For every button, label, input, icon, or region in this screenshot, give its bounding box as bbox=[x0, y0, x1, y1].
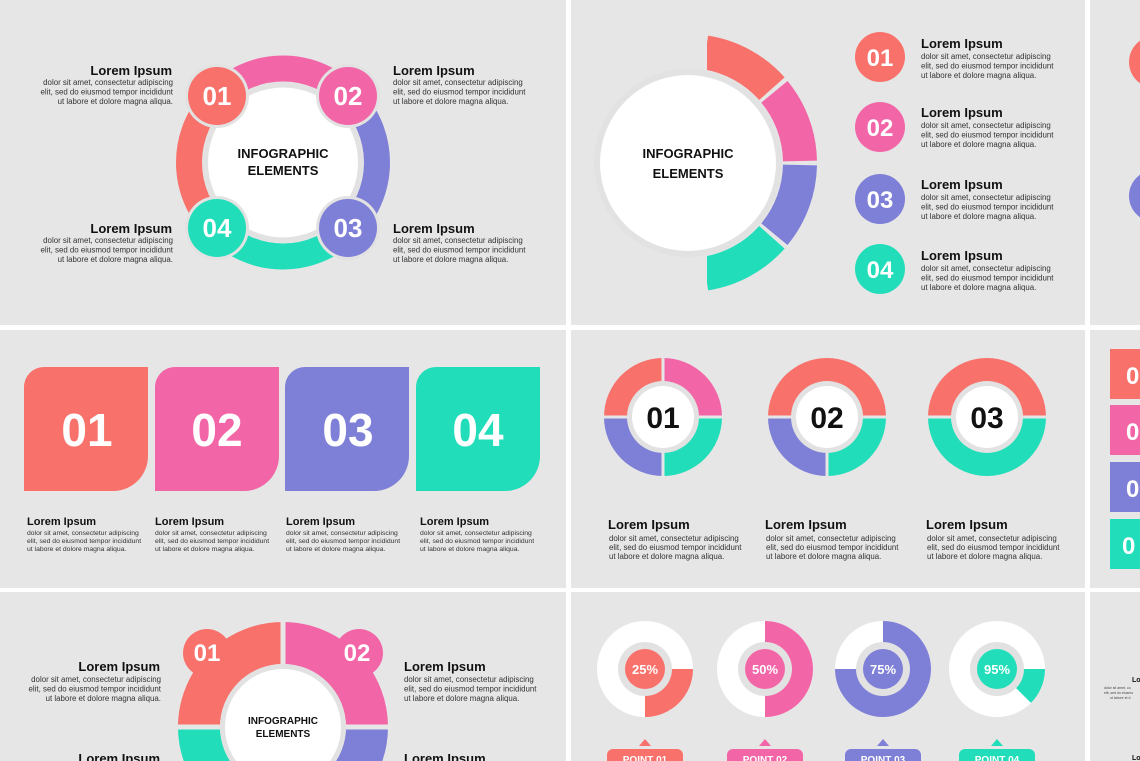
text blocks: dolor sit amet, consectetur adipiscing bbox=[43, 78, 173, 87]
text blocks bbox=[41, 63, 174, 264]
panel: numbered boxes: dolor sit amet, consectetur adipiscing bbox=[286, 530, 398, 537]
panel: quadrant ring with bumps: Lorem Ipsum bbox=[78, 659, 160, 674]
list items: Lorem Ipsum bbox=[921, 177, 1003, 192]
donut captions: ut labore et dolore magna aliqua. bbox=[609, 552, 724, 561]
ring segments bbox=[189, 69, 377, 256]
panel: half arc with list bbox=[594, 20, 1054, 310]
panel: numbered boxes: 01 bbox=[61, 404, 113, 456]
list items: Lorem Ipsum bbox=[921, 248, 1003, 263]
donut 03: 03 bbox=[970, 402, 1004, 435]
panel: numbered boxes: ut labore et dolore magna aliqua. bbox=[155, 546, 254, 553]
panel: quadrant ring with bumps: elit, sed do eiusmod tempor incididunt bbox=[404, 684, 537, 694]
panel: numbered boxes: 03 bbox=[322, 404, 374, 456]
panel: numbered boxes: 04 bbox=[452, 404, 504, 456]
list items: dolor sit amet, consectetur adipiscing bbox=[921, 121, 1051, 130]
text blocks: elit, sed do eiusmod tempor incididunt bbox=[41, 88, 174, 96]
panel: quadrant ring with bumps: INFOGRAPHIC bbox=[248, 716, 318, 727]
panel: right edge stacked boxes: 0 bbox=[1126, 419, 1139, 446]
number circles: 01 bbox=[203, 81, 231, 111]
text blocks: ut labore et dolore magna aliqua. bbox=[58, 97, 173, 106]
donut captions: ut labore et dolore magna aliqua. bbox=[927, 552, 1042, 561]
panel: quadrant ring with bumps: Lorem Ipsum bbox=[404, 659, 486, 674]
donut 02 bbox=[766, 358, 888, 478]
panel: ring with four numbered circles: dolor sit amet, consectetur adipiscing bbox=[393, 236, 523, 245]
pie 25% bbox=[597, 621, 693, 717]
panel: half arc with list: ELEMENTS bbox=[653, 166, 724, 181]
panel: numbered boxes: ut labore et dolore magna aliqua. bbox=[420, 546, 519, 553]
donut captions: Lorem Ipsum bbox=[765, 517, 847, 532]
panel: ring with four numbered circles: elit, sed do eiusmod tempor incididunt bbox=[393, 88, 526, 96]
donut captions: ut labore et dolore magna aliqua. bbox=[766, 552, 881, 561]
panel: numbered boxes: 02 bbox=[191, 404, 243, 456]
text blocks: elit, sed do eiusmod tempor incididunt bbox=[41, 246, 174, 254]
point labels bbox=[607, 739, 1035, 761]
number circles: 03 bbox=[334, 213, 362, 243]
list items: Lorem Ipsum bbox=[921, 105, 1003, 120]
panel: right edge stacked boxes: 0 bbox=[1126, 476, 1139, 503]
donut 02: 02 bbox=[810, 402, 844, 435]
panel: numbered boxes: elit, sed do eiusmod tempor incididunt bbox=[27, 538, 141, 545]
panel: quadrant ring with bumps bbox=[29, 615, 537, 761]
pie 75%: 75% bbox=[870, 662, 896, 677]
number circles: 04 bbox=[203, 213, 232, 243]
panel: segmented donuts bbox=[602, 356, 1060, 561]
list items: elit, sed do eiusmod tempor incididunt bbox=[921, 130, 1054, 140]
panel: quadrant ring with bumps: 01 bbox=[194, 640, 220, 667]
text blocks: dolor sit amet, consectetur adipiscing bbox=[43, 236, 173, 245]
pie 95%: 95% bbox=[984, 662, 1010, 677]
number circles: 02 bbox=[334, 81, 362, 111]
panel: numbered boxes: Lorem Ipsum bbox=[27, 516, 96, 528]
panel: quadrant ring with bumps: dolor sit amet, consectetur adipiscing bbox=[31, 675, 161, 684]
pie 50%: 50% bbox=[752, 662, 778, 677]
list items: ut labore et dolore magna aliqua. bbox=[921, 140, 1036, 149]
list items: elit, sed do eiusmod tempor incididunt bbox=[921, 202, 1054, 212]
panel: right edge stacked boxes: 0 bbox=[1126, 363, 1139, 390]
panel: numbered boxes: ut labore et dolore magna aliqua. bbox=[286, 546, 385, 553]
panel: numbered boxes: Lorem Ipsum bbox=[420, 516, 489, 528]
list items: elit, sed do eiusmod tempor incididunt bbox=[921, 274, 1054, 282]
panel: quadrant ring with bumps: ut labore et dolore magna aliqua. bbox=[404, 694, 519, 703]
panel: right edge tiny text: ut labore et d bbox=[1110, 696, 1130, 700]
donut captions: dolor sit amet, consectetur adipiscing bbox=[927, 534, 1057, 543]
list items: 04 bbox=[867, 257, 894, 284]
panel: ring with four numbered circles bbox=[41, 63, 526, 264]
donut captions: Lorem Ipsum bbox=[926, 517, 1008, 532]
panel: right edge tiny text: elit, sed do eiusmo bbox=[1104, 691, 1133, 695]
donut 01 bbox=[602, 356, 724, 478]
list items: ut labore et dolore magna aliqua. bbox=[921, 212, 1036, 221]
panel: numbered boxes: dolor sit amet, consectetur adipiscing bbox=[155, 530, 267, 537]
panel: ring with four numbered circles: dolor sit amet, consectetur adipiscing bbox=[393, 78, 523, 87]
panel: right edge tiny text bbox=[1104, 677, 1140, 761]
panel: quadrant ring with bumps: dolor sit amet, consectetur adipiscing bbox=[404, 675, 534, 684]
panel: numbered boxes: ut labore et dolore magna aliqua. bbox=[27, 546, 126, 553]
panel: quadrant ring with bumps: ut labore et dolore magna aliqua. bbox=[46, 694, 161, 703]
donut 03 bbox=[926, 358, 1048, 476]
panel: numbered boxes: elit, sed do eiusmod tempor incididunt bbox=[420, 538, 534, 545]
list items: dolor sit amet, consectetur adipiscing bbox=[921, 264, 1051, 273]
list items: 02 bbox=[867, 115, 893, 142]
list items: elit, sed do eiusmod tempor incididunt bbox=[921, 62, 1054, 70]
panel: ring with four numbered circles: Lorem Ipsum bbox=[393, 63, 475, 78]
panel: ring with four numbered circles: Lorem Ipsum bbox=[393, 221, 475, 236]
donut 01: 01 bbox=[646, 402, 680, 435]
donut captions: dolor sit amet, consectetur adipiscing bbox=[766, 534, 896, 543]
panel: numbered boxes: elit, sed do eiusmod tempor incididunt bbox=[286, 538, 400, 545]
donut captions: Lorem Ipsum bbox=[608, 517, 690, 532]
panel: numbered boxes: Lorem Ipsum bbox=[155, 516, 224, 528]
text blocks: Lorem Ipsum bbox=[90, 221, 172, 236]
donut captions: elit, sed do eiusmod tempor incididunt bbox=[927, 543, 1060, 552]
panel: quadrant ring with bumps: 02 bbox=[344, 640, 370, 667]
donut captions: elit, sed do eiusmod tempor incididunt bbox=[609, 543, 742, 552]
panel: right edge stacked boxes bbox=[1110, 349, 1140, 569]
center title: INFOGRAPHIC bbox=[238, 146, 329, 161]
pie 25%: 25% bbox=[632, 662, 658, 677]
list items bbox=[855, 32, 1054, 294]
panel: numbered boxes: Lorem Ipsum bbox=[286, 516, 355, 528]
list items: ut labore et dolore magna aliqua. bbox=[921, 71, 1036, 80]
list items: ut labore et dolore magna aliqua. bbox=[921, 283, 1036, 292]
panel: ring with four numbered circles: ELEMENTS bbox=[248, 163, 319, 178]
panel: numbered boxes: dolor sit amet, consectetur adipiscing bbox=[27, 530, 139, 537]
list items: dolor sit amet, consectetur adipiscing bbox=[921, 193, 1051, 202]
panel: right edge stacked boxes: 0 bbox=[1122, 533, 1135, 560]
panel: numbered boxes: elit, sed do eiusmod tempor incididunt bbox=[155, 538, 269, 545]
pie 95% bbox=[949, 621, 1045, 717]
arc segments bbox=[706, 52, 800, 274]
panel: quadrant ring with bumps: elit, sed do eiusmod tempor incididunt bbox=[29, 684, 162, 694]
donut captions: elit, sed do eiusmod tempor incididunt bbox=[766, 543, 899, 552]
panel: quadrant ring with bumps: ELEMENTS bbox=[256, 729, 311, 740]
list items: dolor sit amet, consectetur adipiscing bbox=[921, 52, 1051, 61]
panel: percentage pies bbox=[597, 621, 1045, 761]
list items: 01 bbox=[867, 45, 893, 72]
panel: right edge tiny text: dolor sit amet, co bbox=[1104, 686, 1131, 690]
number circles bbox=[185, 64, 380, 260]
donut captions: dolor sit amet, consectetur adipiscing bbox=[609, 534, 739, 543]
donut captions bbox=[608, 517, 1060, 561]
arc center title: INFOGRAPHIC bbox=[642, 146, 734, 161]
panel: right edge partial circles bbox=[1129, 36, 1140, 222]
panel: numbered boxes bbox=[24, 367, 540, 553]
panel: ring with four numbered circles: elit, sed do eiusmod tempor incididunt bbox=[393, 246, 526, 254]
pie 75% bbox=[835, 621, 931, 717]
panel: ring with four numbered circles: ut labore et dolore magna aliqua. bbox=[393, 97, 508, 106]
text blocks: ut labore et dolore magna aliqua. bbox=[58, 255, 173, 264]
pie 50% bbox=[717, 621, 813, 717]
text blocks: Lorem Ipsum bbox=[90, 63, 172, 78]
list items: Lorem Ipsum bbox=[921, 36, 1003, 51]
panel: ring with four numbered circles: ut labore et dolore magna aliqua. bbox=[393, 255, 508, 264]
panel: numbered boxes: dolor sit amet, consectetur adipiscing bbox=[420, 530, 532, 537]
list items: 03 bbox=[867, 187, 893, 214]
